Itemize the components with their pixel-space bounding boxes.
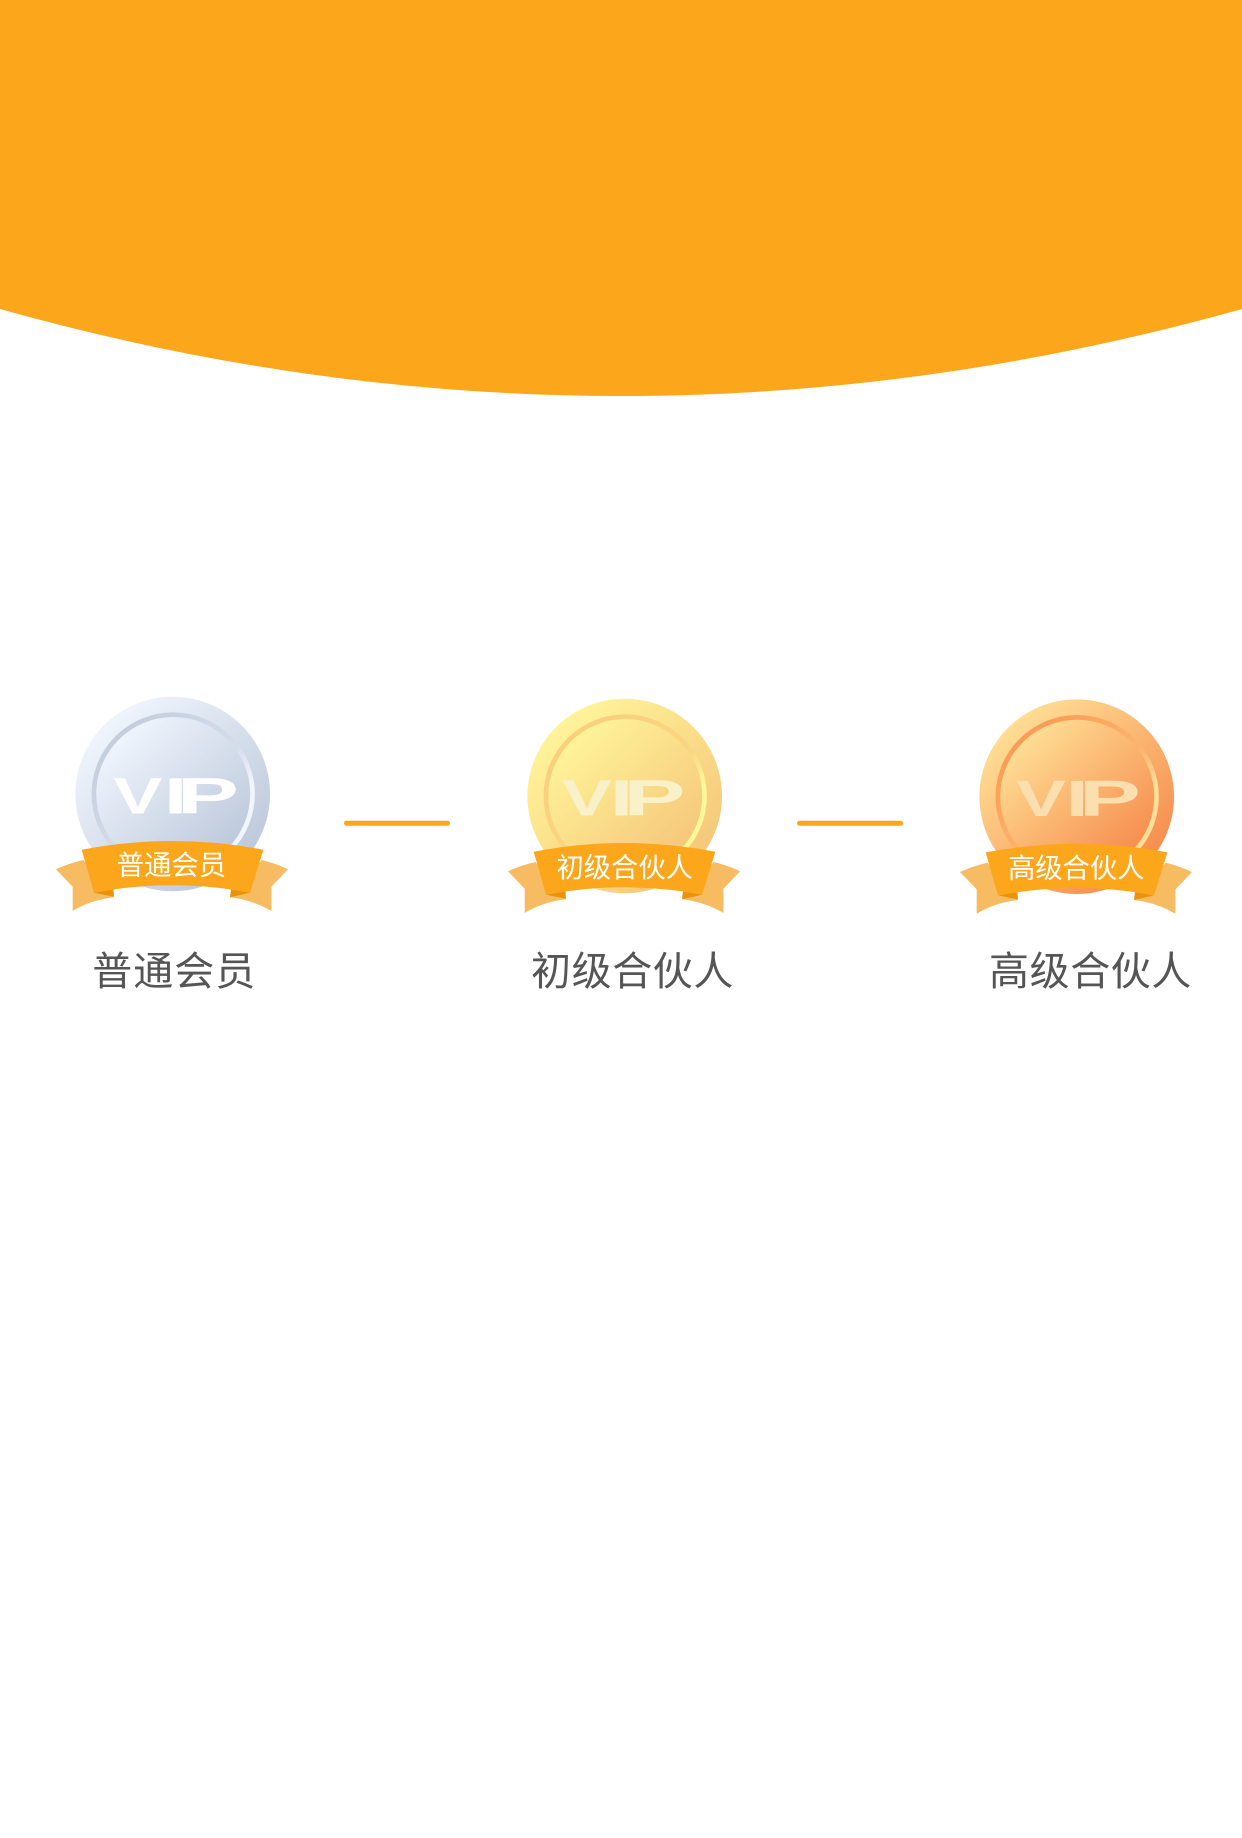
VIP mark: V (562, 770, 612, 826)
label: 初级合伙人: 初级合伙人 (531, 950, 734, 994)
ribbon (960, 844, 1192, 914)
label: 普通会员: 普通会员 (92, 950, 256, 994)
VIP mark: P (1079, 770, 1141, 827)
label: 高级合伙人: 高级合伙人 (989, 950, 1192, 994)
VIP mark: I (164, 767, 187, 824)
VIP mark: I (610, 770, 633, 826)
VIP mark: P (624, 770, 686, 826)
ribbon text: 普通会员 (117, 850, 226, 881)
VIP mark (113, 767, 239, 824)
VIP mark: V (1016, 770, 1066, 827)
VIP mark: P (177, 767, 239, 824)
coin: bronze (979, 699, 1174, 894)
ribbon (56, 841, 288, 911)
VIP mark (562, 770, 686, 826)
connector line 2 (797, 821, 903, 826)
ribbon (508, 843, 740, 913)
VIP mark: V (113, 767, 162, 824)
VIP mark: I (1065, 770, 1089, 827)
medal: 高级合伙人 (960, 699, 1192, 914)
coin: gold (527, 699, 722, 893)
VIP mark (1016, 770, 1141, 827)
coin: silver (75, 697, 270, 891)
medal: 普通会员 (56, 697, 288, 911)
connector line 1 (344, 821, 450, 826)
ribbon text: 初级合伙人 (556, 852, 693, 883)
ribbon text: 高级合伙人 (1008, 853, 1144, 884)
medal: 初级合伙人 (508, 699, 740, 913)
orange header arc (0, 0, 1242, 396)
